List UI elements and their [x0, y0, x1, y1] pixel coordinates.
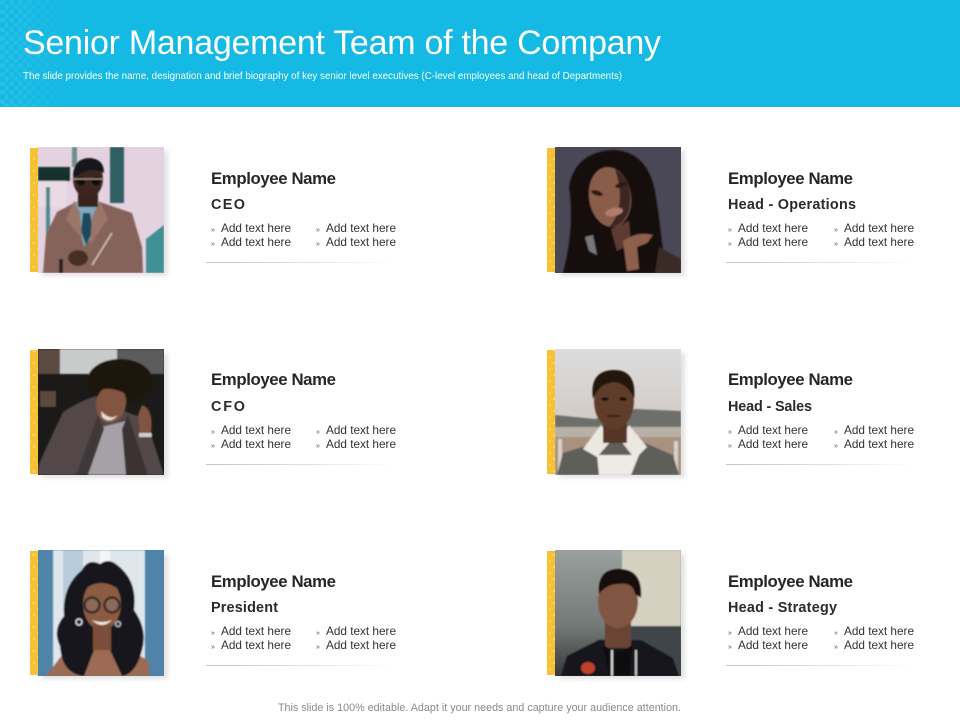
bullet list: »	[211, 241, 215, 248]
employee name: Employee Name	[211, 572, 336, 591]
bullet list: »	[316, 443, 320, 450]
designation: Head - Strategy	[728, 600, 837, 616]
photo shadow	[42, 554, 168, 679]
bullet list: Add text here	[326, 221, 396, 235]
employee name: Employee Name	[728, 169, 853, 188]
bullet list: »	[316, 630, 320, 637]
yellow accent bar	[30, 551, 38, 675]
designation: Head - Operations	[728, 197, 856, 213]
bullet list	[211, 221, 396, 249]
bullet list: Add text here	[738, 437, 808, 451]
team member card: Head - Strategy	[547, 550, 916, 679]
bullet list	[728, 221, 914, 249]
bullet list: Add text here	[844, 423, 914, 437]
portrait photo	[555, 550, 681, 676]
bullet list: »	[728, 227, 732, 234]
bullet list: Add text here	[844, 235, 914, 249]
team member card: Head - Operations	[547, 147, 916, 276]
bullet list: Add text here	[738, 423, 808, 437]
team member card: Head - Sales	[547, 349, 916, 478]
bullet list: »	[211, 443, 215, 450]
designation: Head - Sales	[728, 399, 812, 415]
bullet list: »	[728, 644, 732, 651]
yellow accent bar	[30, 350, 38, 474]
bullet list: Add text here	[221, 624, 291, 638]
employee name: Employee Name	[728, 572, 853, 591]
bullet list: Add text here	[738, 235, 808, 249]
bullet list: Add text here	[326, 235, 396, 249]
bullet list: Add text here	[221, 423, 291, 437]
bullet list: Add text here	[844, 437, 914, 451]
bullet list: »	[834, 630, 838, 637]
designation: CEO	[211, 197, 245, 213]
header banner	[0, 0, 960, 107]
bullet list: »	[728, 241, 732, 248]
bullet list: »	[728, 429, 732, 436]
designation: President	[211, 600, 278, 616]
bullet list: »	[834, 443, 838, 450]
photo shadow	[559, 151, 685, 276]
bullet list: Add text here	[844, 638, 914, 652]
team member card: CEO	[30, 147, 396, 276]
photo shadow	[42, 151, 168, 276]
bullet list: »	[316, 227, 320, 234]
bullet list: »	[316, 241, 320, 248]
bullet list: »	[728, 443, 732, 450]
bullet list	[728, 624, 914, 652]
bullet list: »	[211, 630, 215, 637]
bullet list: »	[834, 644, 838, 651]
bullet list: Add text here	[326, 437, 396, 451]
portrait photo	[38, 147, 164, 273]
employee name: Employee Name	[211, 169, 336, 188]
bullet list: »	[834, 241, 838, 248]
bullet list: Add text here	[221, 235, 291, 249]
bullet list: »	[834, 227, 838, 234]
team member card: President	[30, 550, 396, 679]
bullet list: Add text here	[738, 624, 808, 638]
bullet list	[211, 624, 396, 652]
bullet list: Add text here	[844, 221, 914, 235]
yellow accent bar	[547, 350, 555, 474]
bullet list: »	[834, 429, 838, 436]
bullet list: Add text here	[738, 221, 808, 235]
bullet list	[211, 423, 396, 451]
bullet list: »	[728, 630, 732, 637]
subtitle: The slide provides the name, designation and brief biography of key senior level executives (C-level employees and head of Departments)	[23, 70, 622, 82]
portrait photo	[555, 147, 681, 273]
title: Senior Management Team of the Company	[23, 24, 661, 62]
portrait photo	[555, 349, 681, 475]
employee name: Employee Name	[728, 370, 853, 389]
yellow accent bar	[547, 148, 555, 272]
photo shadow	[559, 353, 685, 478]
bullet list: Add text here	[326, 423, 396, 437]
bullet list: Add text here	[738, 638, 808, 652]
bullet list: Add text here	[326, 624, 396, 638]
photo shadow	[559, 554, 685, 679]
photo shadow	[42, 353, 168, 478]
bullet list: Add text here	[221, 221, 291, 235]
employee name: Employee Name	[211, 370, 336, 389]
designation: CFO	[211, 399, 245, 415]
bullet list: Add text here	[326, 638, 396, 652]
yellow accent bar	[30, 148, 38, 272]
portrait photo	[38, 349, 164, 475]
portrait photo	[38, 550, 164, 676]
bullet list: Add text here	[221, 437, 291, 451]
bullet list: »	[211, 227, 215, 234]
bullet list: »	[316, 644, 320, 651]
bullet list: »	[211, 429, 215, 436]
yellow accent bar	[547, 551, 555, 675]
bullet list: Add text here	[221, 638, 291, 652]
team member card: CFO	[30, 349, 396, 478]
bullet list: Add text here	[844, 624, 914, 638]
bullet list: »	[316, 429, 320, 436]
footer note: This slide is 100% editable. Adapt it your needs and capture your audience attention.	[278, 702, 681, 714]
bullet list	[728, 423, 914, 451]
bullet list: »	[211, 644, 215, 651]
